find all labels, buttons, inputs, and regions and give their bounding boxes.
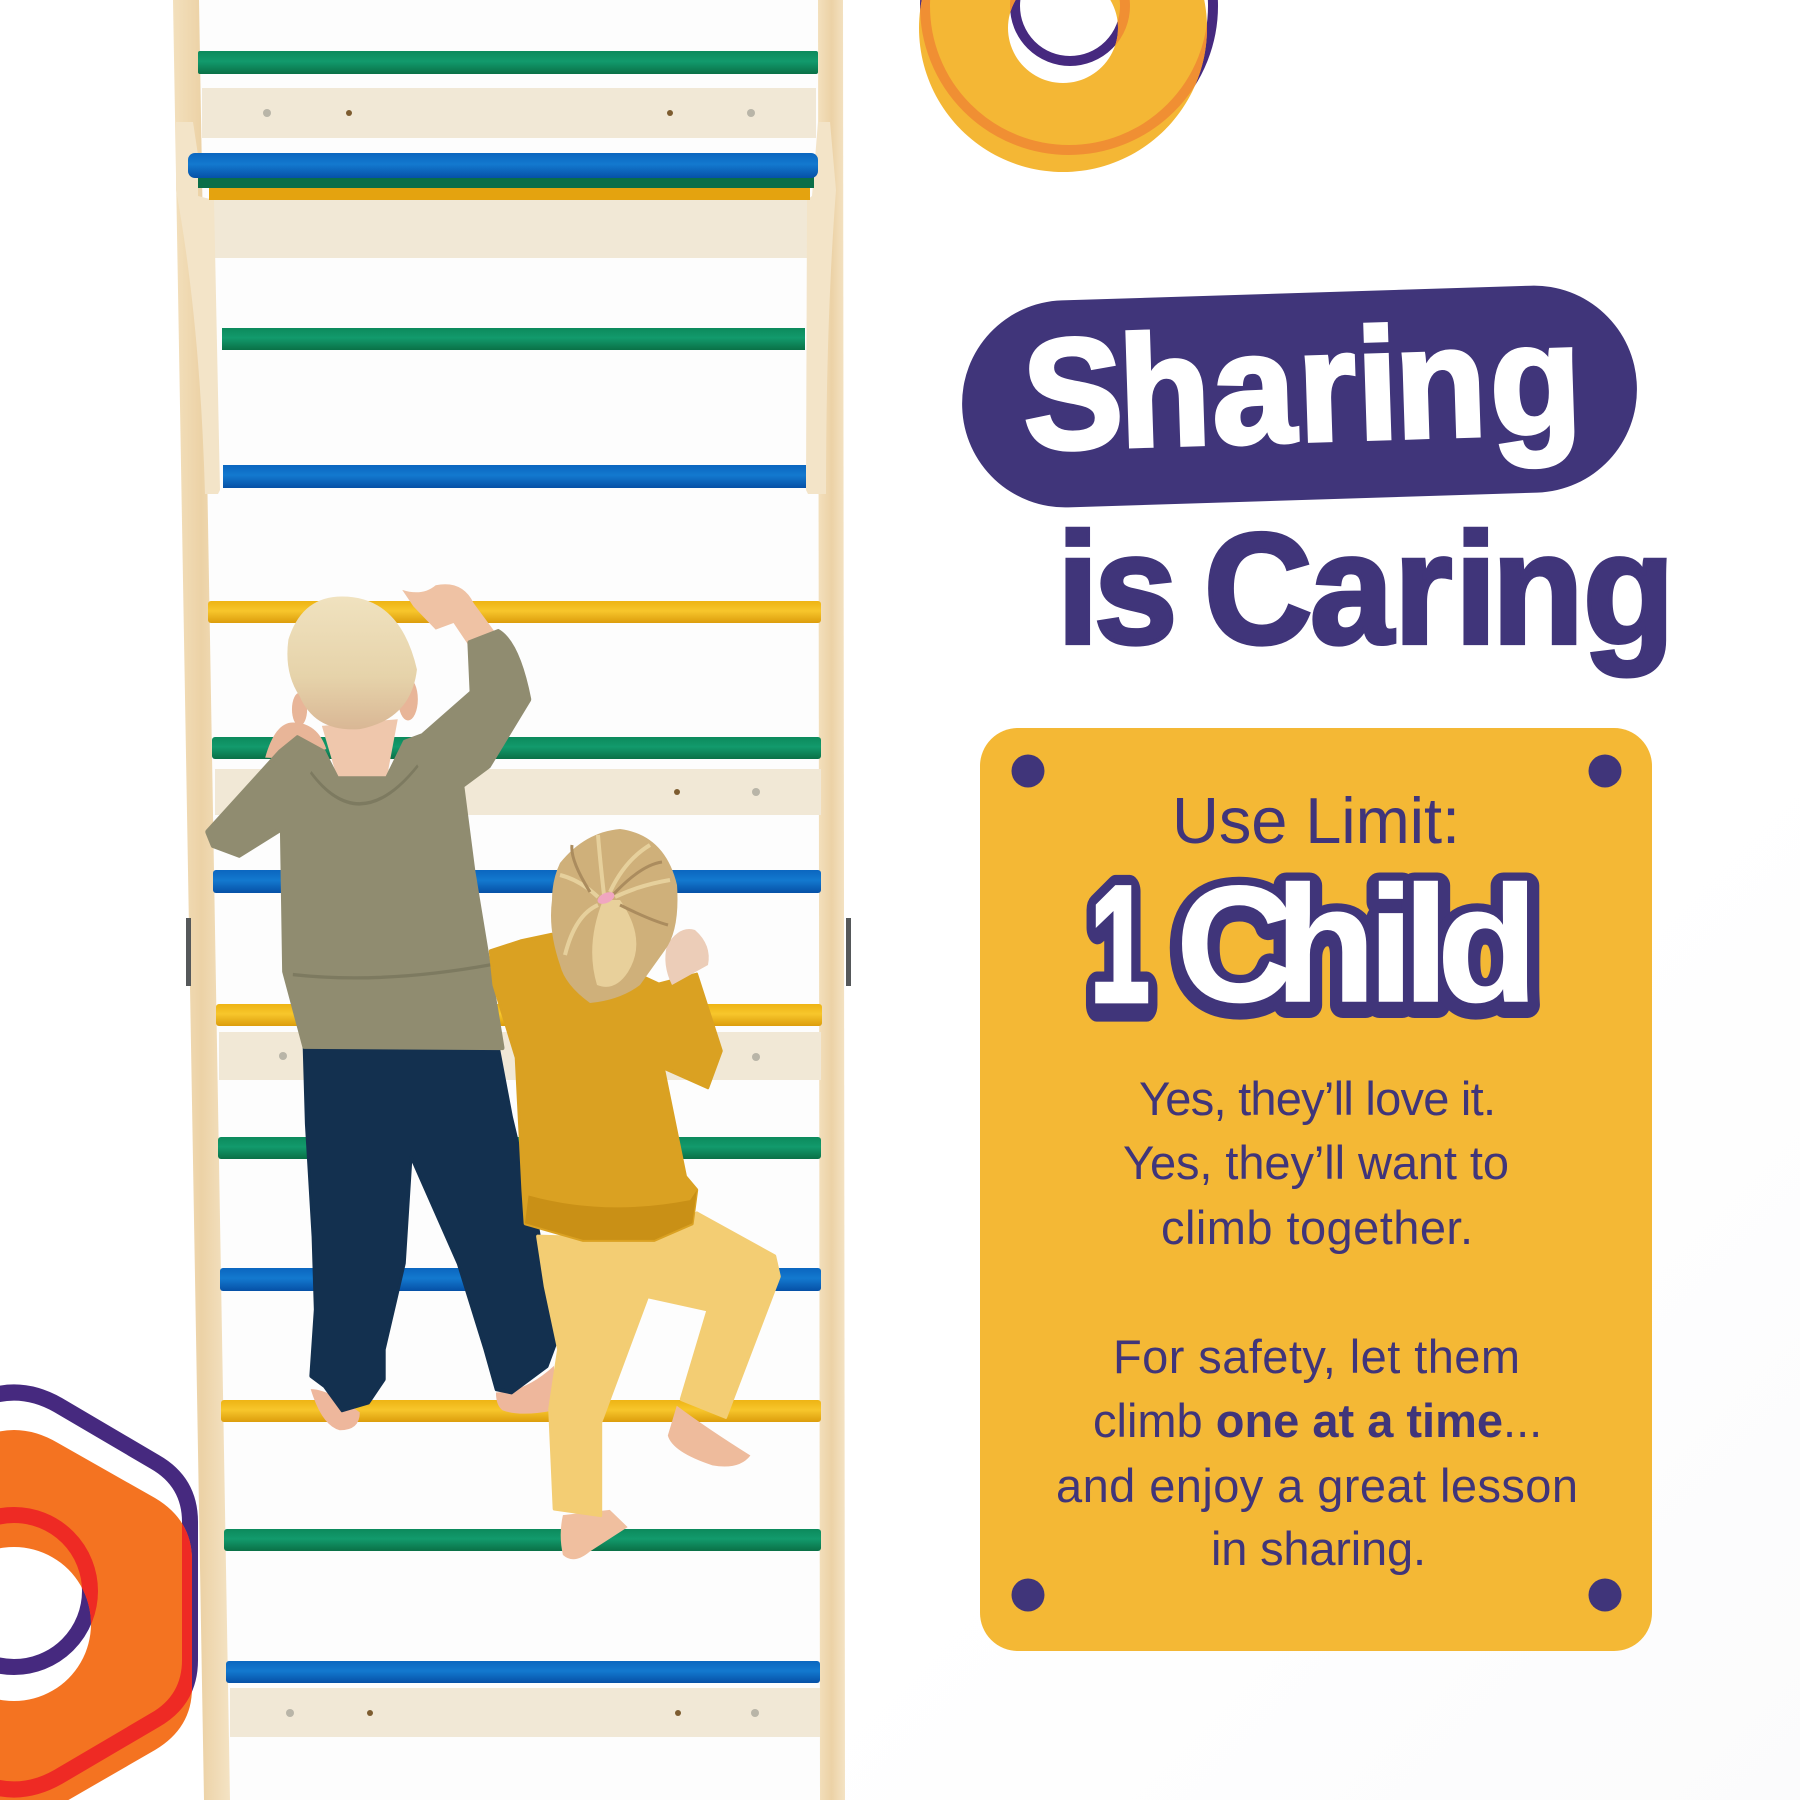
left upright	[173, 0, 230, 1800]
orange hex	[0, 1430, 192, 1800]
use limit label: Use Limit:	[1172, 784, 1460, 857]
girl feet	[668, 1406, 750, 1467]
numeral one: 1	[1090, 853, 1150, 1037]
body copy: climb together.	[1161, 1201, 1473, 1254]
title second line: is Caring	[1057, 501, 1675, 677]
one child headline	[1090, 852, 1538, 1041]
body copy: climb one at a time...	[1093, 1394, 1542, 1447]
boy pants	[304, 1046, 557, 1410]
boy	[207, 584, 557, 1430]
girl hair	[551, 829, 678, 1003]
bottom-left decorative hex nut	[0, 1392, 192, 1800]
title pill with Sharing: Sharing	[1020, 290, 1584, 483]
girl	[490, 935, 779, 1559]
darker strands	[572, 845, 668, 925]
purple outlines	[0, 1392, 190, 1790]
left curved bracket	[176, 122, 220, 494]
body copy: Yes, they’ll love it.	[1139, 1072, 1496, 1125]
boy shirt hood fold	[293, 766, 491, 978]
body copy: and enjoy a great lesson	[1056, 1459, 1578, 1512]
boy feet	[311, 1366, 554, 1430]
orange overlap rings	[925, 0, 1213, 150]
corner dots	[1012, 754, 1622, 1612]
boy hair	[287, 596, 417, 729]
wall area behind ladder	[199, 0, 820, 1800]
coloured rungs	[188, 51, 822, 1683]
wooden cross panels	[202, 88, 821, 1737]
scrunchie	[596, 890, 616, 906]
purple outline rings	[925, 0, 1213, 150]
screws	[263, 109, 760, 1717]
two children climbing	[207, 584, 779, 1559]
boy left hand	[265, 723, 326, 759]
girl pants	[537, 1213, 779, 1515]
boy right hand and forearm	[402, 584, 495, 646]
word child: Child	[1176, 852, 1538, 1036]
ponytail	[592, 900, 636, 987]
hair strands	[560, 835, 670, 955]
gold ring	[919, 0, 1207, 172]
numeral one outline: 1	[1090, 857, 1150, 1041]
body copy: Yes, they’ll want to	[1123, 1136, 1509, 1189]
title	[959, 282, 1675, 677]
children bodies	[207, 584, 779, 1559]
boy neck	[322, 719, 398, 779]
boy shirt	[207, 632, 529, 1048]
girl sweater	[490, 935, 721, 1240]
body copy: For safety, let them	[1113, 1330, 1520, 1383]
card background	[980, 728, 1652, 1651]
girl hand	[665, 929, 709, 985]
hair mass	[551, 829, 678, 1003]
boy ears	[292, 693, 307, 726]
body copy	[1056, 1072, 1578, 1575]
left hinge	[186, 918, 191, 986]
red overlap outlines	[0, 1507, 192, 1798]
right hinge	[846, 918, 851, 986]
wall bars ladder	[173, 0, 851, 1800]
right upright	[818, 0, 845, 1800]
girl sweater hem	[525, 1190, 697, 1240]
right curved bracket	[806, 122, 836, 494]
top decorative nut	[919, 0, 1213, 172]
word child outline: Child	[1176, 856, 1538, 1040]
body copy: in sharing.	[1211, 1522, 1426, 1575]
yellow use limit card	[980, 728, 1652, 1651]
